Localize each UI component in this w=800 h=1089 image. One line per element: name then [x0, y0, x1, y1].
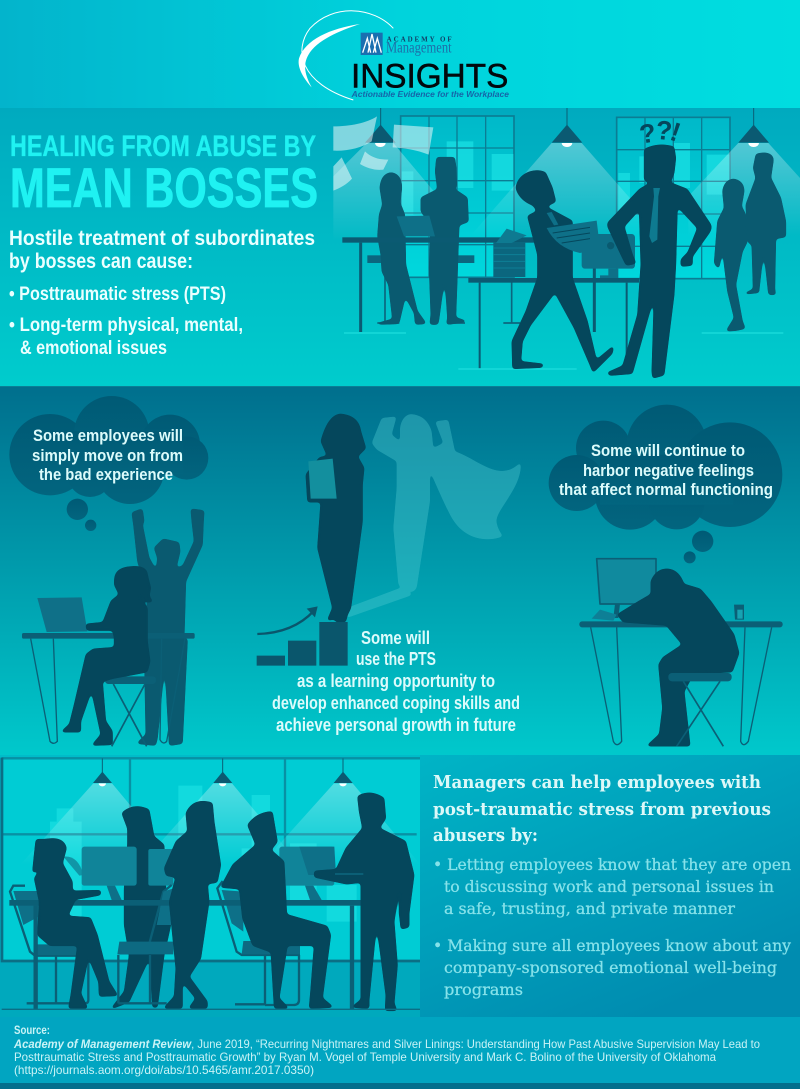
advice bullets [433, 855, 791, 999]
intro text: • Long-term physical, mental, [9, 315, 243, 336]
desk with hairpin legs [579, 621, 783, 745]
silhouette: employee carrying papers [513, 171, 613, 371]
center text [272, 628, 520, 735]
question marks [637, 115, 684, 150]
advice bullets: a safe, trusting, and private manner [444, 899, 735, 918]
advice bullets: to discussing work and personal issues in [444, 877, 774, 896]
silhouette: seated man [222, 812, 332, 1008]
silhouette: man arms raised [133, 510, 203, 745]
source text: Academy of Management Review, June 2019, “Recurring Nightmares and Silver Linings: Understanding How Past Abusive Supervision May Lead to [13, 1037, 760, 1051]
illustration: angry boss in office [333, 108, 800, 377]
front desk [468, 278, 639, 369]
center text: as a learning opportunity to [297, 671, 495, 691]
chairs [10, 881, 300, 1005]
bars [257, 622, 348, 666]
center text: achieve personal growth in future [276, 715, 516, 735]
advice bullets: • Making sure all employees know about any [433, 936, 791, 955]
desk with hairpin legs [22, 633, 195, 743]
illustration: superhero shadow [347, 414, 521, 618]
flying papers [333, 116, 433, 191]
background desk and benches [367, 255, 520, 323]
computer monitor [582, 234, 635, 278]
illustration: growth stairs and standing woman [257, 415, 365, 666]
source text: Posttraumatic Stress and Posttraumatic Growth” by Ryan M. Vogel of Temple University and Mark C. Bolino of the University of Oklahoma [14, 1050, 716, 1064]
silhouette: woman with cup [165, 802, 220, 1008]
advice heading: Managers can help employees with [433, 772, 761, 793]
intro text: • Posttraumatic stress (PTS) [9, 284, 226, 305]
question marks: ? [655, 115, 674, 146]
intro text: by bosses can cause: [9, 250, 193, 273]
bubble text: move on [32, 426, 183, 484]
panel: three responses [0, 387, 800, 757]
advice heading: post-traumatic stress from previous [433, 799, 771, 820]
logo: Academy of Management Insights: Actionable Evidence for the Workplace [351, 89, 509, 99]
long desk [9, 900, 377, 1010]
bubble text: move on: Some employees will [33, 426, 183, 445]
panel: team illustration [0, 755, 421, 1017]
intro text: Hostile treatment of subordinates [9, 227, 315, 250]
question marks: ? [637, 118, 658, 150]
silhouette: woman right [715, 180, 747, 330]
advice heading [433, 772, 771, 846]
logo: Academy of Management Insights: Management [386, 40, 452, 57]
paper stack [493, 229, 527, 277]
title: MEAN BOSSES [10, 156, 318, 219]
stool [105, 676, 156, 746]
silhouette: angry boss [608, 146, 711, 377]
rear desk [342, 237, 594, 332]
silhouette: standing woman behind desk [113, 807, 170, 1008]
thought bubble: negative feelings [549, 405, 782, 563]
laptop [397, 216, 435, 236]
advice heading: abusers by: [433, 825, 538, 846]
source text: Source: [14, 1023, 50, 1037]
center text: use the PTS [356, 649, 436, 669]
bubble text: move on: simply move on from [32, 446, 183, 465]
intro text: & emotional issues [20, 338, 167, 359]
bubble text: negative feelings: that affect normal functioning [559, 480, 773, 499]
panel: intro [0, 108, 800, 388]
intro text [9, 227, 315, 359]
document [308, 459, 337, 499]
silhouette: seated woman [33, 839, 117, 1008]
center text: develop enhanced coping skills and [272, 693, 520, 713]
silhouette: slumped woman [618, 570, 738, 745]
question marks: ! [667, 116, 684, 148]
title [10, 130, 318, 219]
monitor [597, 559, 656, 604]
panel: manager advice [420, 755, 800, 1017]
window wall [2, 758, 421, 961]
logo: Academy of Management Insights: INSIGHTS [351, 57, 508, 95]
silhouette: standing manager [315, 794, 413, 1010]
office windows [401, 116, 730, 279]
silhouette: man right [746, 154, 785, 294]
silhouette: woman left [378, 173, 425, 324]
panel: source [0, 1017, 800, 1089]
growth arrow [257, 611, 314, 634]
advice bullets: company-sponsored emotional well-being [444, 958, 777, 977]
illustration: slumped employee at desk [579, 559, 783, 746]
header band [0, 0, 800, 108]
laptop [37, 597, 87, 632]
floor shadows [344, 332, 783, 370]
ceiling lamps [20, 758, 421, 865]
advice bullets: programs [444, 980, 523, 999]
advice bullets: • Letting employees know that they are open [433, 855, 791, 874]
laptop held by manager [299, 847, 336, 875]
thought bubble: move on [9, 396, 208, 531]
logo: Academy of Management Insights: ACADEMY OF [387, 35, 452, 43]
silhouette: seated woman [63, 567, 152, 745]
logo: Academy of Management Insights [299, 11, 509, 100]
source text [13, 1023, 760, 1077]
illustration: celebrating employees at desk [22, 510, 203, 746]
monitors [63, 847, 334, 900]
ceiling lamps [333, 108, 800, 241]
title: HEALING FROM ABUSE BY [10, 130, 316, 163]
bubble text: negative feelings [559, 441, 773, 499]
bubble text: move on: the bad experience [39, 465, 173, 484]
floor line [2, 1007, 421, 1011]
bubble text: negative feelings: harbor negative feelings [583, 461, 754, 480]
center text: Some will [361, 628, 430, 648]
silhouette: woman with document [307, 415, 365, 621]
desk items [592, 605, 744, 621]
source text: (https://journals.aom.org/doi/abs/10.5465/amr.2017.0350) [14, 1063, 314, 1077]
stool [668, 673, 732, 746]
silhouette: man left [422, 158, 468, 324]
bubble text: negative feelings: Some will continue to [591, 441, 745, 460]
